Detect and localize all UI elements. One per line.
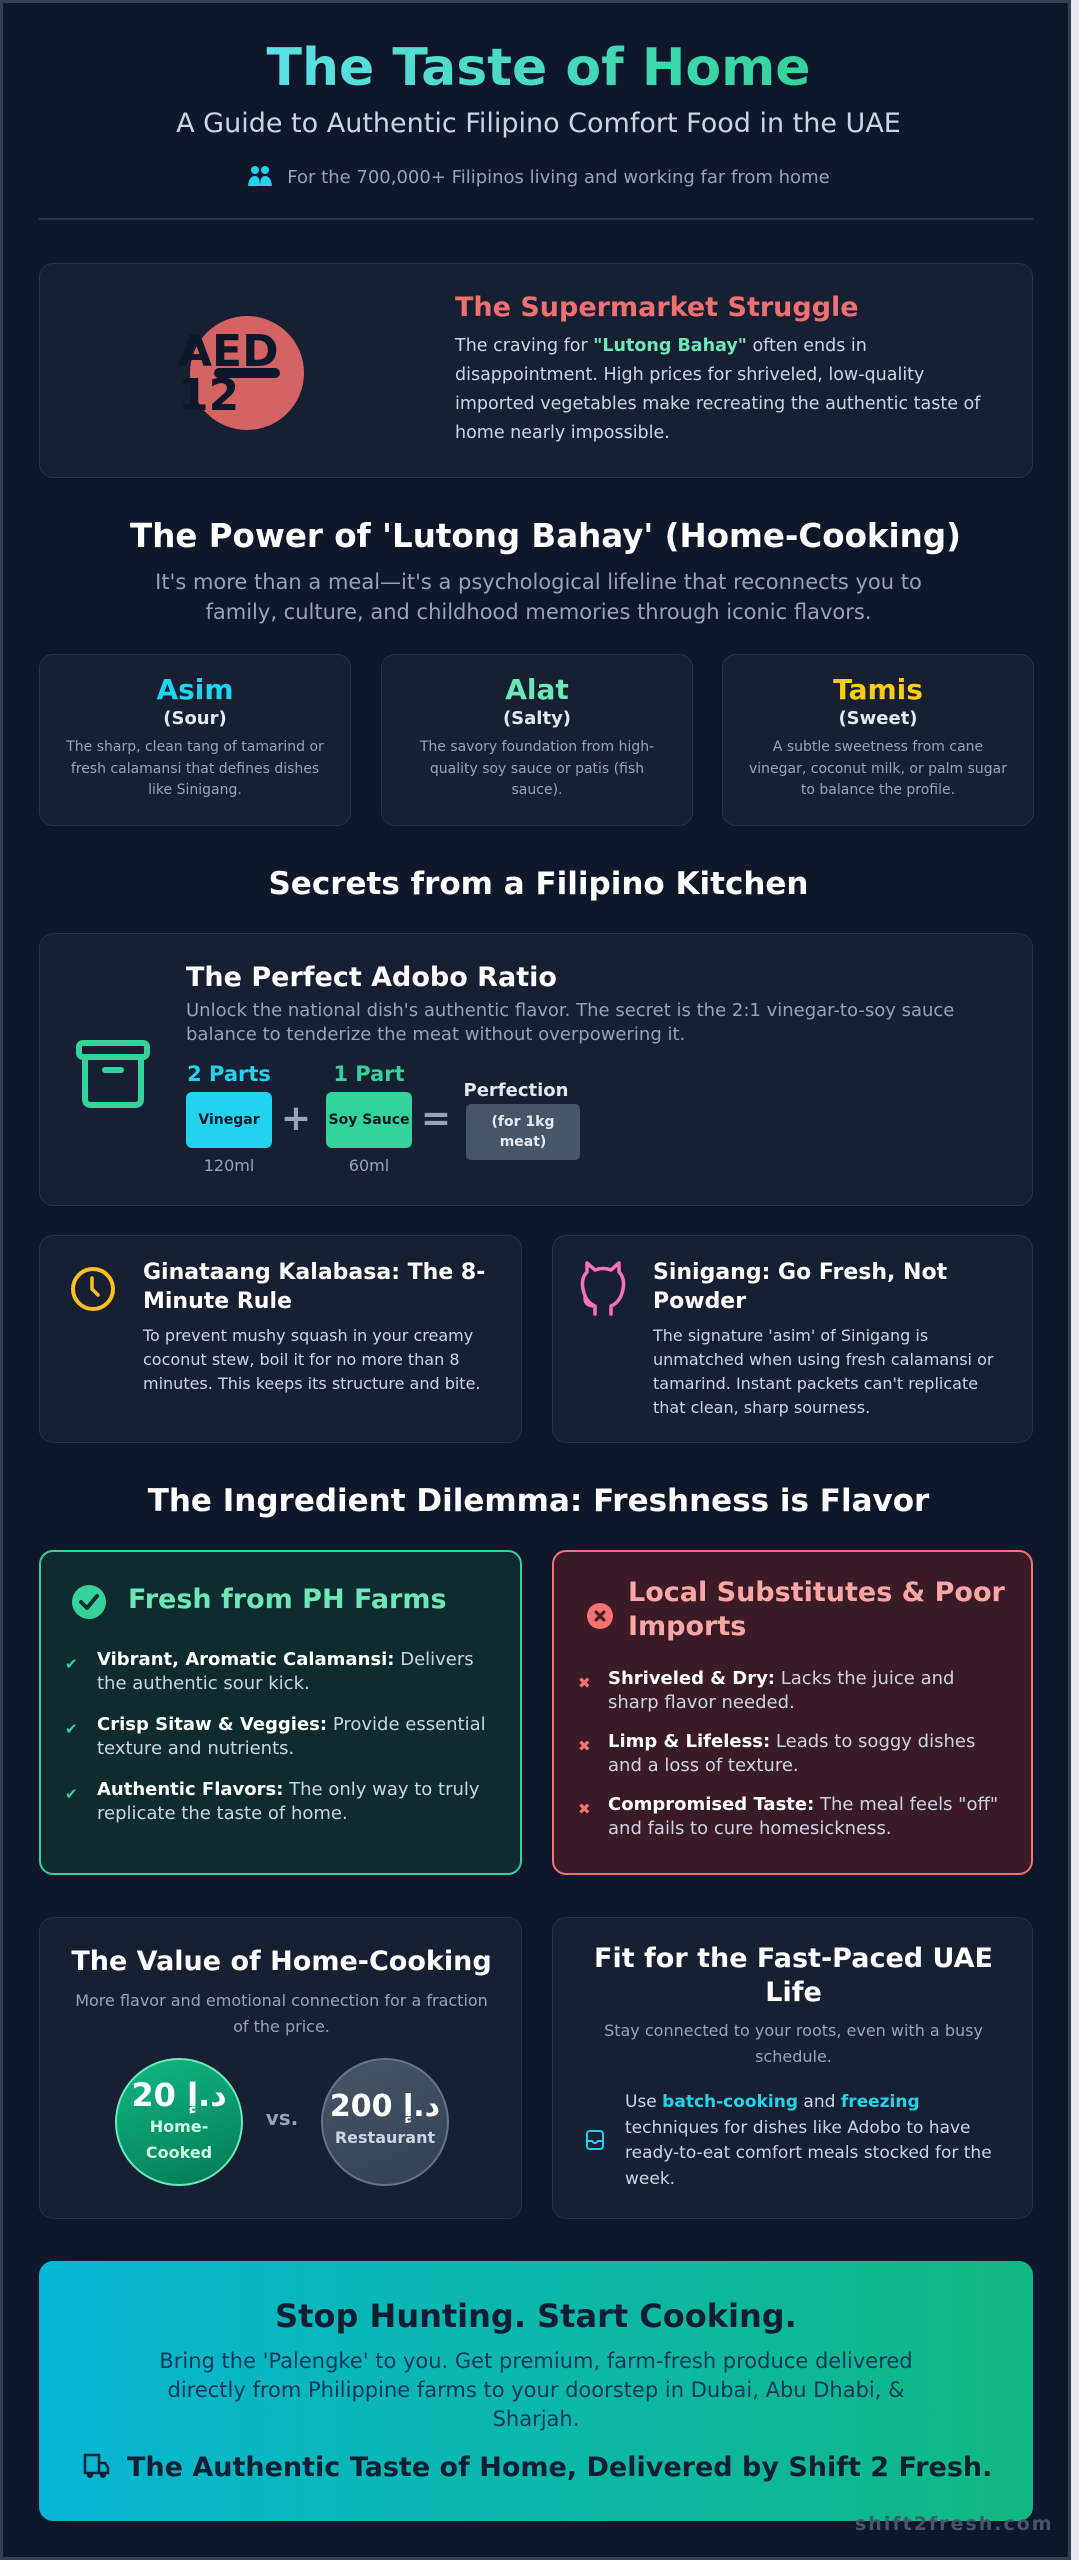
card: value of home-cooking [39,1917,522,2219]
card: fast-paced UAE life [552,1917,1033,2219]
icon: check circle [72,1585,106,1619]
subheading: It's more than a meal—it's a psychological lifeline that reconnects you to family, culture, and childhood memories through iconic flavors. [155,570,922,624]
card: asim: (Sour) [163,708,227,729]
list: fresh benefits: Vibrant, Aromatic Calamansi: Delivers the authentic sour kick. [97,1649,474,1694]
icon: github-style cat [580,1261,626,1316]
icon: AED price circle: 12 [178,370,239,421]
list: substitute problems [578,1668,998,1839]
ratio diagram: 2 Parts [187,1062,271,1086]
heading: power of lutong bahay: The Power of 'Lutong Bahay' (Home-Cooking) [130,517,961,555]
subtitle: A Guide to Authentic Filipino Comfort Food in the UAE [176,108,901,139]
panel: local substitutes [552,1550,1033,1875]
panel: fresh from PH farms: Fresh from PH Farms [128,1584,447,1615]
tagline with truck icon: The Authentic Taste of Home, Delivered by Shift 2 Fresh. [127,2452,992,2483]
chart: price comparison circles: Cooked [146,2143,212,2162]
description: Unlock the national dish's authentic flavor. The secret is the 2:1 vinegar-to-soy sauce balance to tenderize the meat without overpowering it. [186,1000,954,1045]
ratio diagram: Soy Sauce [328,1112,410,1128]
list: substitute problems: ✖ [578,1737,591,1755]
ratio diagram: + [281,1098,311,1139]
ratio diagram: meat) [500,1134,546,1150]
card: sinigang: Sinigang: Go Fresh, Not Powder [653,1260,947,1314]
ratio diagram: 120ml [204,1156,254,1175]
icon: inbox [586,2130,604,2150]
card: alat: The savory foundation from high-quality soy sauce or patis (fish sauce). [420,739,654,798]
body text: The craving for "Lutong Bahay" often ends in disappointment. High prices for shriveled, low-quality imported vegetables make recreating the authentic taste of home nearly impossible. [455,336,980,443]
card: sinigang: The signature 'asim' of Sinigang is unmatched when using fresh calamansi or tamarind. Instant packets can't replicate that clean, sharp sourness. [653,1326,993,1417]
card: tamis: (Sweet) [838,708,918,729]
chart: price comparison circles: 20 د.إ [131,2076,227,2114]
chart: price comparison circles: Home- [150,2117,208,2136]
card: fast-paced UAE life: Fit for the Fast-Paced UAE Life [594,1943,993,2008]
CTA banner [39,2261,1033,2521]
card: tamis: A subtle sweetness from cane vinegar, coconut milk, or palm sugar to balance the profile. [749,739,1007,798]
card: alat [381,654,693,826]
card: tamis: Tamis [833,673,923,706]
list: substitute problems: Limp & Lifeless: Leads to soggy dishes and a loss of texture. [608,1731,975,1776]
chart: price comparison circles: 200 د.إ [330,2089,440,2124]
list: substitute problems: Compromised Taste: The meal feels "off" and fails to cure homesickness. [608,1794,998,1839]
panel: fresh from PH farms [39,1550,522,1875]
card: asim [39,654,351,826]
list: fresh benefits: Authentic Flavors: The only way to truly replicate the taste of home. [97,1779,480,1824]
panel: adobo ratio [39,933,1033,1206]
card: asim: Asim [156,673,234,706]
card: fast-paced UAE life: Use batch-cooking and freezing techniques for dishes like Adobo to have ready-to-eat comfort meals stocked for the week. [625,2092,992,2188]
card: tamis [722,654,1034,826]
card: alat: Alat [505,673,569,706]
card: value of home-cooking: The Value of Home-Cooking [71,1946,492,1977]
card: alat: (Salty) [503,708,571,729]
list: fresh benefits [65,1649,486,1824]
footer url: shift2fresh.com [855,2513,1054,2535]
heading: ingredient dilemma: The Ingredient Dilemma: Freshness is Flavor [148,1483,929,1519]
CTA banner: Stop Hunting. Start Cooking. [275,2297,797,2335]
list: fresh benefits: ✔ [65,1785,78,1803]
list: substitute problems: ✖ [578,1800,591,1818]
CTA banner: Bring the 'Palengke' to you. Get premium, farm-fresh produce delivered directly from Philippine farms to your doorstep in Dubai, Abu Dhabi, & Sharjah. [159,2349,913,2431]
title: The Taste of Home [266,38,811,98]
chart: price comparison circles: Restaurant [335,2128,435,2147]
list: fresh benefits: Crisp Sitaw & Veggies: Provide essential texture and nutrients. [97,1714,486,1759]
list: fresh benefits: ✔ [65,1655,78,1673]
ratio diagram: Perfection [464,1080,568,1101]
icon: x circle [587,1603,613,1629]
chart: price comparison circles: vs. [266,2106,298,2130]
panel: supermarket struggle [39,263,1033,478]
card: fast-paced UAE life: Stay connected to your roots, even with a busy schedule. [604,2021,983,2066]
chart: price comparison circles [115,2058,449,2186]
ratio diagram: 60ml [349,1156,389,1175]
ratio diagram: (for 1kg [492,1114,554,1130]
heading: The Perfect Adobo Ratio [186,962,557,993]
icon: container [76,1040,150,1108]
list: fresh benefits: ✔ [65,1720,78,1738]
list: substitute problems: ✖ [578,1674,591,1692]
card: ginataang kalabasa: To prevent mushy squash in your creamy coconut stew, boil it for no more than 8 minutes. This keeps its structure and bite. [143,1326,481,1393]
icon: clock [71,1267,115,1311]
card: value of home-cooking: More flavor and emotional connection for a fraction of the price. [75,1991,488,2036]
card: sinigang [552,1235,1033,1443]
list: substitute problems: Shriveled & Dry: Lacks the juice and sharp flavor needed. [608,1668,954,1713]
icon: AED price circle: AED [178,326,279,377]
ratio diagram [186,1062,580,1175]
panel: local substitutes: Local Substitutes & Poor Imports [628,1577,1005,1642]
icon: AED price circle [190,316,304,430]
ratio diagram: = [421,1098,451,1139]
heading: secrets: Secrets from a Filipino Kitchen [268,866,809,902]
ratio diagram: Vinegar [198,1112,260,1128]
card: ginataang kalabasa [39,1235,522,1443]
heading: The Supermarket Struggle [455,292,859,323]
card: asim: The sharp, clean tang of tamarind or fresh calamansi that defines dishes like Sinigang. [66,739,324,798]
card: ginataang kalabasa: Ginataang Kalabasa: The 8-Minute Rule [143,1260,485,1314]
ratio diagram: 1 Part [333,1062,405,1086]
audience line: For the 700,000+ Filipinos living and working far from home [287,167,830,188]
